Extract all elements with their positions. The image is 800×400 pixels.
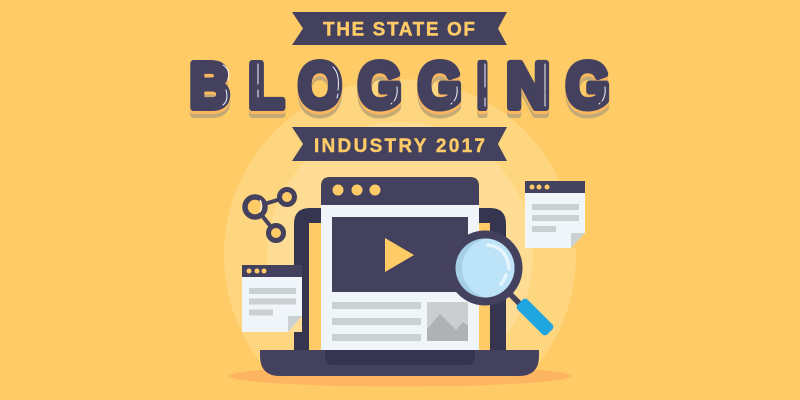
icon: share	[245, 190, 294, 240]
magnifier handle	[515, 297, 555, 337]
title gloss highlights	[223, 64, 605, 106]
video player	[332, 217, 468, 292]
window body	[321, 205, 479, 350]
title front layer: N	[506, 50, 550, 122]
title shadow layer: N	[506, 56, 550, 128]
title shadow layer: G	[566, 56, 610, 128]
title front layer: G	[358, 50, 402, 122]
title front layer: G	[566, 50, 610, 122]
banner text: industry 2017: INDUSTRY 2017	[314, 136, 485, 157]
laptop screen	[309, 223, 490, 350]
laptop keyboard notch	[325, 350, 475, 365]
title front layer: I	[477, 50, 488, 122]
browser window	[321, 177, 479, 350]
title orange layer: B	[190, 52, 230, 124]
title shadow layer: L	[248, 56, 284, 128]
laptop shadow	[229, 366, 571, 386]
magnifier neck	[510, 294, 524, 308]
title orange layer: O	[298, 52, 342, 124]
magnifier ring	[448, 230, 522, 306]
title orange layer: N	[506, 52, 550, 124]
bottom ribbon banner	[292, 127, 507, 161]
play icon	[385, 238, 414, 272]
banner text: the state of: THE STATE OF	[323, 20, 475, 41]
title orange layer: G	[418, 52, 462, 124]
top ribbon banner	[292, 12, 507, 45]
note: right	[525, 181, 585, 248]
title orange layer: G	[566, 52, 610, 124]
title shadow layer: G	[358, 56, 402, 128]
title shadow layer: G	[418, 56, 462, 128]
background circle: inner glow	[267, 122, 533, 376]
magnifier lens	[456, 238, 514, 298]
title orange layer	[190, 52, 610, 124]
window dots	[332, 184, 380, 196]
title orange layer: L	[248, 52, 284, 124]
title shadow layer: B	[190, 56, 230, 128]
window header	[321, 177, 479, 205]
laptop	[260, 208, 539, 376]
title front layer: G	[418, 50, 462, 122]
title shadow layer: O	[298, 56, 342, 128]
title orange layer: I	[477, 52, 488, 124]
title front layer: B	[190, 50, 230, 122]
image thumbnail	[427, 302, 468, 341]
title orange layer: G	[358, 52, 402, 124]
icon: magnifying glass	[448, 230, 555, 337]
title front layer: L	[248, 50, 284, 122]
title front layer	[190, 50, 610, 122]
title: blogging	[190, 50, 610, 128]
background circle: outer glow	[224, 79, 576, 376]
text lines	[332, 302, 421, 341]
laptop screen frame	[294, 208, 506, 350]
title shadow layer	[190, 56, 610, 128]
laptop base	[260, 350, 539, 376]
title front layer: O	[298, 50, 342, 122]
note: left	[242, 265, 302, 332]
title shadow layer: I	[477, 56, 488, 128]
